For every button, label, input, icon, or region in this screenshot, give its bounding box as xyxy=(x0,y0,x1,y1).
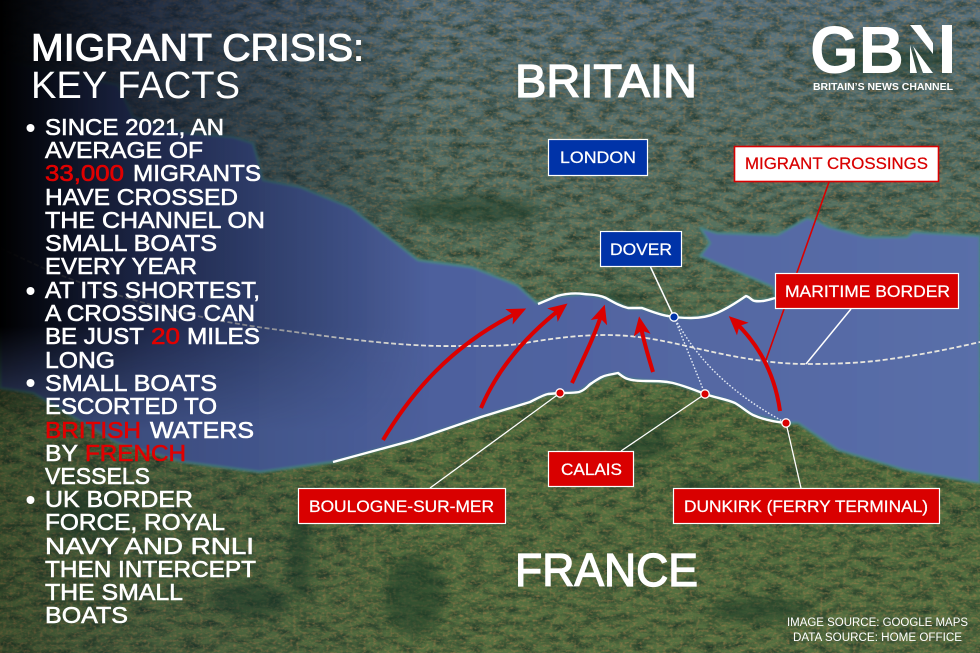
fact 1: MIGRANTS xyxy=(133,160,261,186)
fact 4: UK BORDER xyxy=(45,486,193,512)
key facts list xyxy=(26,114,265,628)
calais marker xyxy=(701,390,709,398)
fact 2: 20 xyxy=(151,323,180,349)
fact 3: ESCORTED TO xyxy=(45,393,217,419)
English Channel sea xyxy=(0,60,980,483)
GB News logo: GB xyxy=(810,13,904,88)
fact 3: VESSELS xyxy=(45,463,150,489)
migrant crossing leader line xyxy=(766,182,829,360)
fact 1: THE CHANNEL ON xyxy=(45,207,265,233)
source credits: DATA SOURCE: HOME OFFICE xyxy=(793,632,962,644)
fact 1: SMALL BOATS xyxy=(45,230,217,256)
heading: KEY FACTS xyxy=(31,65,240,107)
place markers with leader lines xyxy=(430,267,801,488)
label: Dunkirk xyxy=(674,488,940,524)
fact 3 xyxy=(26,370,254,489)
heading: MIGRANT CRISIS: xyxy=(31,28,364,70)
England coastline highlight xyxy=(538,293,775,318)
dover leader xyxy=(650,267,674,317)
fact 2: AT ITS SHORTEST, xyxy=(45,277,260,303)
boulogne marker xyxy=(556,389,564,397)
label: Dover: DOVER xyxy=(610,240,672,259)
fact 1: EVERY YEAR xyxy=(45,253,197,279)
label: Migrant Crossings: MIGRANT CROSSINGS xyxy=(745,154,928,173)
maritime border dashed line xyxy=(0,248,980,364)
dunkirk marker xyxy=(782,419,790,427)
fact 3: WATERS xyxy=(150,417,254,443)
label: Boulogne-sur-Mer xyxy=(298,488,506,524)
label: Calais: CALAIS xyxy=(561,460,622,479)
fact 3: BY xyxy=(45,440,78,466)
maritime border leader line xyxy=(806,309,851,364)
label: Maritime Border: MARITIME BORDER xyxy=(785,282,950,301)
fact 1: HAVE CROSSED xyxy=(45,184,238,210)
fact 3: FRENCH xyxy=(85,440,186,466)
label: Migrant Crossings xyxy=(734,146,938,182)
France coastline highlight xyxy=(333,373,786,462)
fact 1: 33,000 xyxy=(45,160,124,186)
fact 4 xyxy=(26,486,256,628)
fact 2: LONG xyxy=(45,347,115,373)
dover marker xyxy=(670,313,678,321)
boulogne leader xyxy=(430,393,560,488)
fact 3: SMALL BOATS xyxy=(45,370,217,396)
fact 4: THEN INTERCEPT xyxy=(45,556,256,582)
fact 4: FORCE, ROYAL xyxy=(45,509,225,535)
fact 2: A CROSSING CAN xyxy=(45,300,255,326)
fact 4: BOATS xyxy=(45,602,128,628)
ferry route dotted lines xyxy=(674,317,786,423)
source credits xyxy=(787,617,968,644)
source credits: IMAGE SOURCE: GOOGLE MAPS xyxy=(787,617,968,629)
fact 2: BE JUST xyxy=(45,323,144,349)
label: Boulogne-sur-Mer: BOULOGNE-SUR-MER xyxy=(309,497,494,516)
label: London: LONDON xyxy=(560,148,636,167)
label: Dover xyxy=(600,232,682,266)
label: Maritime Border xyxy=(776,274,958,308)
heading xyxy=(31,28,364,107)
fact 1: AVERAGE OF xyxy=(45,137,203,163)
crossing arrows xyxy=(383,307,780,440)
fact 3: BRITISH xyxy=(45,417,141,443)
fact 4: NAVY AND RNLI xyxy=(45,533,254,559)
fact 4: THE SMALL xyxy=(45,579,183,605)
label: Dunkirk: DUNKIRK (FERRY TERMINAL) xyxy=(684,497,928,516)
GB News logo: BRITAIN’S NEWS CHANNEL xyxy=(813,81,954,93)
fact 2 xyxy=(26,277,260,373)
fact 1: SINCE 2021, AN xyxy=(45,114,224,140)
left dark gradient panel xyxy=(0,0,430,653)
fact 1 xyxy=(26,114,265,279)
dunkirk leader xyxy=(786,423,801,488)
GB News logo xyxy=(810,13,954,93)
country label: Britain: BRITAIN xyxy=(515,55,697,107)
label: Calais xyxy=(548,452,634,486)
fact 2: MILES xyxy=(187,323,260,349)
country label: France: FRANCE xyxy=(515,544,698,596)
label: London xyxy=(548,140,648,176)
calais leader xyxy=(621,394,705,451)
